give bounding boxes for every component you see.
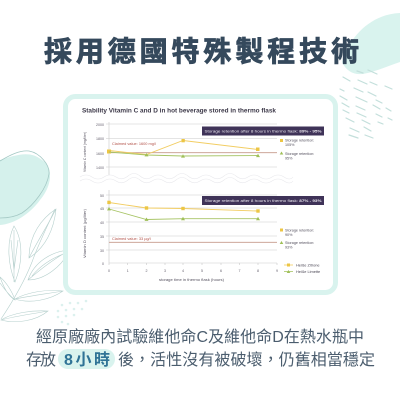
y axis title: Vitamin C content (mg/liter) <box>83 132 87 172</box>
y axis labels: 50 <box>100 194 104 198</box>
x axis labels: 2 <box>146 269 148 273</box>
title: 採用德國特殊製程技術 <box>44 36 359 67</box>
axis labels: 1400 <box>96 166 104 170</box>
retention banner <box>202 126 324 136</box>
decorative mint blob top right <box>342 13 400 74</box>
chart: vitamin D <box>83 190 324 282</box>
y axis labels: 30 <box>100 249 104 253</box>
x axis labels: 5 <box>201 269 203 273</box>
x axis labels: 0 <box>108 269 110 273</box>
claimed value label: Claimed value: 1600 mg/l <box>112 141 156 146</box>
legend: yellow retention <box>280 228 314 237</box>
decorative mint pebble left <box>0 151 50 225</box>
series: yellow <box>107 201 260 213</box>
chart heading: Stability Vitamin C and D in hot beverage stored in thermo flask <box>82 108 276 114</box>
legend: series key: Heiße Limette <box>296 269 320 274</box>
legend: green retention: Storage retention: <box>285 152 314 156</box>
panel: chart card <box>66 96 336 292</box>
y axis title: Vitamin D content (µg/liter) <box>83 209 87 258</box>
x axis labels: 8 <box>257 269 259 273</box>
axis labels: 1800 <box>96 137 104 141</box>
y axis labels <box>100 194 104 266</box>
highlight pill <box>58 349 115 369</box>
x axis labels <box>108 269 278 273</box>
legend: yellow retention: 90% <box>285 233 293 237</box>
legend: series key <box>284 262 320 274</box>
x axis labels: 7 <box>238 269 240 273</box>
series: green <box>109 152 260 158</box>
retention banner: Storage retention after 8 hours in thermo flask: 89% - 95% <box>204 129 322 134</box>
legend: green retention: Storage retention: <box>285 241 314 245</box>
decorative dashes right <box>340 70 392 138</box>
claimed value label: Claimed value: 33 µg/l <box>112 236 151 241</box>
legend: green retention: 95% <box>285 156 293 160</box>
x axis labels: 1 <box>127 269 129 273</box>
series: yellow <box>107 139 260 154</box>
legend: green retention <box>280 152 314 160</box>
x axis title: storage time in thermo flask (hours) <box>159 278 224 282</box>
y axis labels: 40 <box>100 221 104 225</box>
x axis labels: 3 <box>164 269 166 273</box>
decorative dots under panel <box>57 300 87 325</box>
legend: yellow retention: Storage retention: <box>285 228 314 232</box>
axis labels: 1600 <box>96 152 104 156</box>
legend: yellow retention <box>280 138 314 147</box>
caption line 2 <box>26 349 375 369</box>
legend: green retention <box>280 241 314 250</box>
caption line 2: 8小時 <box>64 351 110 369</box>
retention banner: Storage retention after 8 hours in thermo flask: 87% - 93% <box>204 198 322 203</box>
series: green <box>107 207 260 221</box>
legend: yellow retention: Storage retention: <box>285 138 314 142</box>
retention banner <box>202 196 324 205</box>
caption line 1: 經原廠廠內試驗維他命C及維他命D在熱水瓶中 <box>36 327 364 346</box>
claimed value line <box>109 152 277 154</box>
x axis labels: 9 <box>276 269 278 273</box>
legend: green retention: 93% <box>285 246 293 250</box>
legend: series key: Heiße Zitrone <box>296 262 320 268</box>
y axis labels: 45 <box>100 207 104 211</box>
axis labels <box>96 123 104 170</box>
axis labels: 2000 <box>96 123 104 127</box>
leaf illustration <box>0 209 70 322</box>
caption line 2: 存放 <box>26 351 56 369</box>
x axis labels: 6 <box>220 269 222 273</box>
y axis labels: 0 <box>102 262 104 266</box>
chart: vitamin C <box>80 122 324 183</box>
legend: yellow retention: 105% <box>285 143 295 147</box>
claimed value line <box>109 241 277 243</box>
caption line 2: 後，活性沒有被破壞，仍舊相當穩定 <box>118 351 375 369</box>
y axis labels: 35 <box>100 235 104 239</box>
x axis labels: 4 <box>182 269 184 273</box>
